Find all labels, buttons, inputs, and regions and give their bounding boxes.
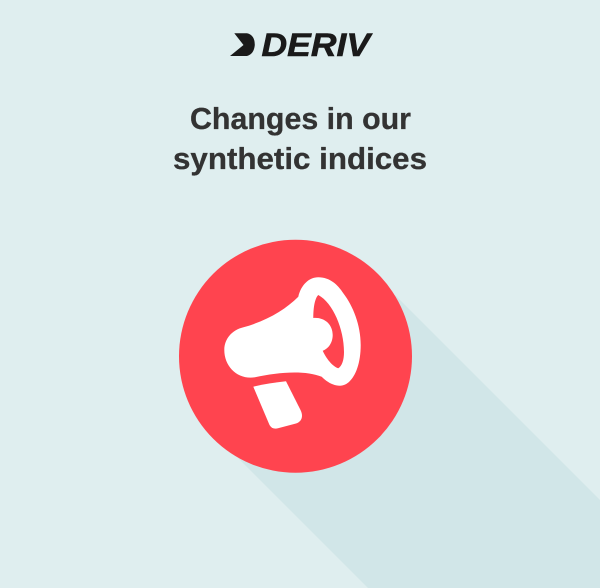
- icon: megaphone handle: [253, 381, 302, 429]
- title: Changes in our: [190, 101, 411, 136]
- logo: Deriv: [230, 27, 373, 63]
- logo wordmark: DERIV: [262, 27, 373, 63]
- icon: Deriv chevron mark: [230, 33, 255, 56]
- icon: red circle with megaphone: [179, 240, 412, 473]
- long shadow: [230, 295, 600, 588]
- red circle: [179, 240, 412, 473]
- title: [173, 101, 427, 176]
- icon: megaphone body: [224, 277, 361, 386]
- title: synthetic indices: [173, 141, 427, 176]
